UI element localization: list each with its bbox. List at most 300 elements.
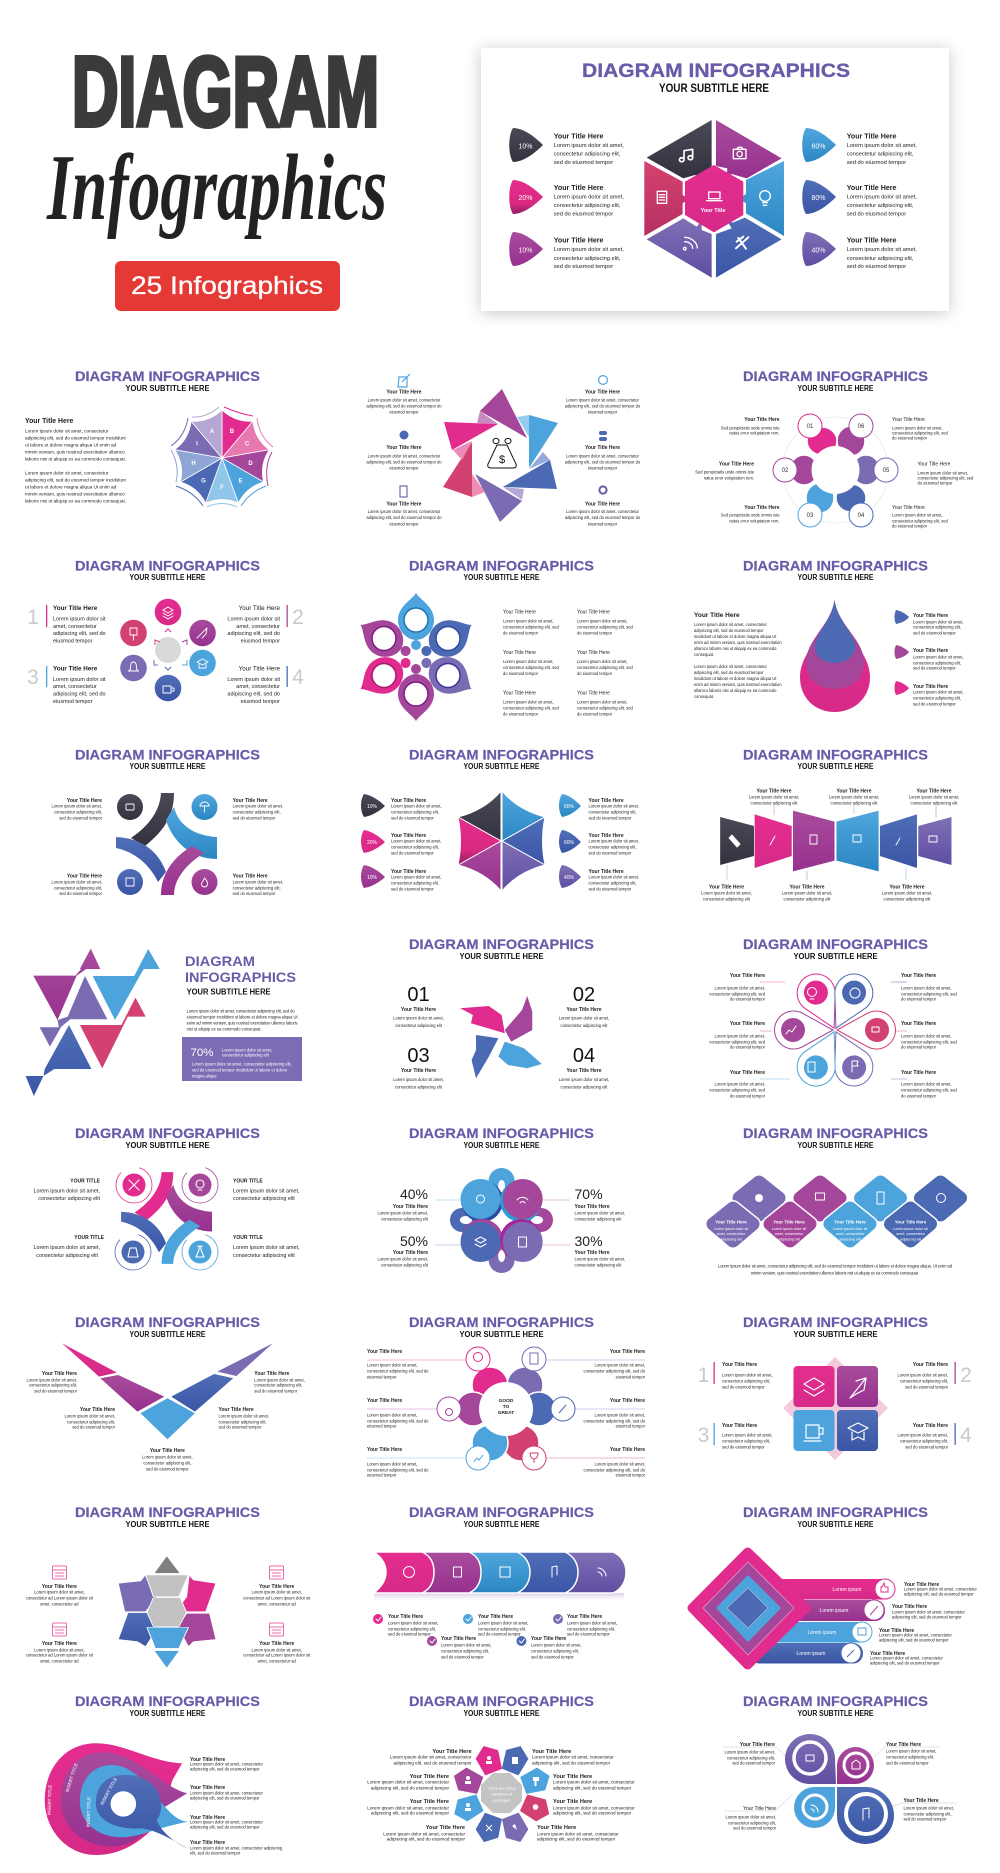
left text: adipiscing elit, sed do eiusmod tempor xyxy=(694,628,764,633)
right text: consectetur adipiscing elit, xyxy=(904,1812,952,1816)
right text: adipiscing elit, sed do eiusmod tempor do xyxy=(565,515,641,520)
texts: consectetur adipiscing elit, xyxy=(254,1382,302,1388)
left text: consectetur adipiscing elit, xyxy=(391,810,439,814)
hero left percent markers: 20% xyxy=(518,195,533,202)
text block: laboris nisi ut aliquip ex ea commodo consequat. xyxy=(25,498,126,504)
texts: consectetur adipiscing elit xyxy=(574,1262,622,1268)
left text: Your Title Here xyxy=(410,1774,449,1780)
texts: Your Title Here xyxy=(401,1007,436,1013)
left text: consectetur adipiscing elit, xyxy=(722,1438,770,1444)
heading: YOUR SUBTITLE HERE xyxy=(798,1520,874,1529)
left text: consectetur adipiscing elit, sed xyxy=(709,1088,766,1092)
hero left text: consectetur adipiscing elit, xyxy=(554,152,621,158)
center label: variations of xyxy=(491,1792,513,1796)
heading: DIAGRAM xyxy=(185,954,255,969)
left text xyxy=(695,417,780,524)
texts: Your Title Here xyxy=(80,1407,115,1413)
left text: Your Title Here xyxy=(432,1749,472,1755)
stat box: consectetur adipiscing elit xyxy=(222,1052,270,1058)
left text: Lorem ipsum dolor sit amet, xyxy=(714,1082,765,1086)
texts xyxy=(388,1614,618,1660)
texts: consectetur adipiscing elit, xyxy=(441,1648,489,1654)
heading xyxy=(75,1314,260,1339)
caption xyxy=(718,1264,953,1276)
octagon diagram xyxy=(171,407,273,507)
heading: DIAGRAM INFOGRAPHICS xyxy=(743,1504,928,1520)
left text: Sed perspiciatis unde omnis iste xyxy=(721,512,780,518)
right text: Lorem ipsum dolor sit amet, xyxy=(233,1245,300,1251)
percent markers: 20% xyxy=(367,840,378,846)
bottom text: Your Title Here xyxy=(789,884,825,890)
heading: DIAGRAM INFOGRAPHICS xyxy=(743,1314,928,1330)
right text: Lorem ipsum dolor sit amet, xyxy=(233,804,283,808)
caption: minim veniam, quis nostrud exercitation ullamco laboris nisi ut aliquip ex ea commodo consequat. xyxy=(751,1270,919,1276)
hero right text: consectetur adipiscing elit, xyxy=(847,203,914,209)
heading: DIAGRAM INFOGRAPHICS xyxy=(409,1125,594,1141)
right text: Your Title Here xyxy=(532,1749,571,1755)
left text: do eiusmod tempor xyxy=(730,996,766,1002)
left text: Lorem ipsum dolor sit amet, consectetur xyxy=(367,1806,449,1810)
main title: Infographics script: Infographics xyxy=(46,136,387,240)
diamonds xyxy=(713,1182,960,1241)
stat box: magna aliqua xyxy=(192,1074,217,1078)
bottom text: consectetur adipiscing elit xyxy=(703,896,751,902)
text grid: Your Title Here xyxy=(503,610,536,616)
texts: adipiscing elit, sed do eiusmod tempor xyxy=(879,1638,949,1642)
texts: Your Title Here xyxy=(892,1604,927,1610)
percent markers: 10% xyxy=(367,804,378,810)
text grid: do eiusmod tempor xyxy=(577,671,613,676)
left text: eiusmod tempor xyxy=(389,466,419,470)
left text: Lorem ipsum dolor sit amet, xyxy=(51,804,102,808)
heading: YOUR SUBTITLE HERE xyxy=(798,573,874,582)
right text: Your Title Here xyxy=(892,417,925,423)
circle diagram xyxy=(120,599,216,701)
text grid: do eiusmod tempor xyxy=(577,712,613,716)
texts: consectetur adipiscing elit, xyxy=(218,1420,267,1424)
heading xyxy=(409,1125,594,1150)
left text: consectetur adipiscing elit xyxy=(38,1196,100,1202)
right text: Your Title Here xyxy=(886,1742,921,1748)
panel: arc cross 2 xyxy=(33,1125,300,1270)
ring diagram xyxy=(773,414,898,527)
right text: consectetur adipiscing elit, sed do xyxy=(584,1368,646,1374)
texts: Lorem ipsum dolor sit amet, xyxy=(377,1256,428,1262)
top text: consectetur adipiscing elit xyxy=(751,800,798,806)
center label xyxy=(498,1398,514,1416)
hero center label: Your Title xyxy=(701,208,725,214)
texts: adipiscing elit, sed do eiusmod tempor xyxy=(190,1766,260,1772)
text grid: consectetur adipiscing elit, sed xyxy=(577,665,633,670)
diamond texts: adipiscing elit xyxy=(900,1238,921,1242)
right text: Lorem ipsum dolor sit amet, xyxy=(913,690,964,694)
hero left percent markers: 10% xyxy=(518,144,533,150)
right text: Lorem ipsum dolor sit amet, xyxy=(897,1432,948,1438)
right text: YOUR TITLE xyxy=(233,1235,263,1241)
hero left text: Your Title Here xyxy=(554,132,604,140)
heading xyxy=(743,1125,928,1150)
right text: Your Title Here xyxy=(239,666,280,672)
percent markers: 60% xyxy=(564,804,575,810)
diamond texts: Your Title Here xyxy=(773,1220,805,1224)
heading: DIAGRAM INFOGRAPHICS xyxy=(743,368,928,384)
left text: Your Title Here xyxy=(722,1423,757,1429)
numbers and bars xyxy=(27,605,304,689)
texts: amet, consectetur ad xyxy=(40,1658,79,1664)
body text: Lorem ipsum dolor sit amet, consectetur adipiscing elit, sed do xyxy=(187,1008,295,1014)
swirl shape xyxy=(45,1743,189,1855)
texts: Lorem ipsum dolor sit amet, xyxy=(251,1648,302,1652)
right text: Your Title Here xyxy=(913,684,948,690)
left text: Lorem ipsum dolor sit amet, xyxy=(391,874,442,880)
octagon diagram: A xyxy=(210,429,215,435)
heading xyxy=(743,558,928,582)
left text: sed do eiusmod tempor xyxy=(722,1384,765,1390)
left text xyxy=(51,798,103,896)
right text: Lorem ipsum dolor sit amet, xyxy=(588,804,639,808)
octagon diagram: B xyxy=(230,429,235,435)
bottom text xyxy=(701,884,932,902)
hero left text: sed do eiusmod tempor xyxy=(554,160,613,166)
left text: Your Title Here xyxy=(743,1806,776,1812)
drop chart xyxy=(800,600,870,712)
hero left text xyxy=(554,132,624,270)
text grid xyxy=(503,610,633,716)
text block: ut labore et dolore magna aliqua Ut enim ad xyxy=(25,442,117,448)
stat box: Lorem ipsum dolor sit amet, xyxy=(222,1048,273,1052)
hero right text: sed do eiusmod tempor xyxy=(847,212,906,218)
left text: consectetur adipiscing elit, xyxy=(54,886,102,890)
texts: consectetur adipiscing elit xyxy=(381,1216,429,1222)
ring diagram: 02 xyxy=(782,468,789,474)
left text: adipiscing elit, sed do eiusmod tempor do xyxy=(366,460,442,464)
texts: Your Title Here xyxy=(218,1407,254,1413)
heading: DIAGRAM INFOGRAPHICS xyxy=(75,746,260,762)
hero left text: Your Title Here xyxy=(554,236,604,244)
insert title labels: INSERT TITLE xyxy=(46,1785,53,1815)
right text: Lorem ipsum dolor sit amet, consectetur xyxy=(532,1754,614,1760)
texts: sed do eiusmod tempor xyxy=(531,1654,574,1660)
heading: DIAGRAM INFOGRAPHICS xyxy=(75,1693,260,1709)
left text: Lorem ipsum dolor sit amet, xyxy=(714,1034,765,1038)
right text: Lorem ipsum dolor sit amet, consectetur xyxy=(537,1832,619,1836)
panel: rounded diamonds xyxy=(713,1125,960,1276)
heading xyxy=(743,1314,928,1339)
left text xyxy=(367,1749,472,1842)
text grid: Your Title Here xyxy=(577,690,610,696)
left text: Lorem ipsum dolor sit amet, xyxy=(33,1245,100,1251)
texts: adipiscing elit, sed do eiusmod tempor xyxy=(870,1660,940,1666)
percents: 50% xyxy=(400,1233,428,1249)
right text: consectetur adipiscing elit xyxy=(233,1196,295,1202)
octagon diagram: H xyxy=(191,461,196,467)
bar labels: Lorem ipsum xyxy=(820,1608,848,1614)
panel: four squares xyxy=(698,1314,972,1460)
text block: adipiscing elit, sed do eiusmod tempor incididunt xyxy=(25,478,127,482)
bar labels: Lorem ipsum xyxy=(808,1630,836,1636)
texts: Your Title Here xyxy=(150,1448,185,1454)
texts: Lorem ipsum dolor sit amet, xyxy=(478,1620,529,1626)
center label: GOOD xyxy=(499,1398,514,1404)
panel: four ring petals xyxy=(722,1693,957,1844)
texts: consectetur adipiscing elit, xyxy=(531,1648,579,1654)
flower diagram xyxy=(352,593,480,721)
right text: adipiscing elit, sed do eiusmod tempor xyxy=(553,1810,632,1816)
caption: Lorem ipsum dolor sit amet, consectetur adipiscing elit, sed do eiusmod tempor incididunt ut labore et dolore magna aliqua. Ut enim ad xyxy=(718,1264,953,1268)
panel: arc cross 1 xyxy=(51,746,283,896)
heading xyxy=(743,936,928,961)
hero right text: consectetur adipiscing elit, xyxy=(847,256,914,262)
texts: consectetur adipiscing elit xyxy=(395,1084,443,1090)
bar labels: Lorem ipsum xyxy=(797,1651,825,1657)
left text: Sed perspiciatis unde omnis iste xyxy=(721,426,780,430)
texts: Your Title Here xyxy=(574,1250,610,1256)
left text: Lorem ipsum dolor sit amet, consectetur xyxy=(694,664,767,669)
left text: adipiscing elit, sed do eiusmod tempor xyxy=(387,1836,465,1842)
left text: eiusmod tempor xyxy=(389,522,419,526)
ring diagram: 05 xyxy=(883,468,890,474)
texts: Lorem ipsum dolor sit amet, consectetur xyxy=(190,1820,263,1824)
right text: consectetur adipiscing elit, sed do xyxy=(584,1468,646,1472)
left text: consectetur adipiscing elit, sed do xyxy=(367,1418,429,1424)
texts xyxy=(393,1007,609,1090)
text grid: consectetur adipiscing elit, sed xyxy=(503,665,559,670)
right text: consectetur adipiscing elit, sed xyxy=(892,518,948,524)
right text: sed do eiusmod tempor xyxy=(588,816,632,820)
text block: laboris nisi ut aliquip ex ea commodo consequat. xyxy=(25,456,126,462)
stat box: 70% xyxy=(190,1047,214,1059)
right text: sed do eiusmod tempor xyxy=(233,891,276,896)
ring diagram: 01 xyxy=(807,424,814,430)
bottom text: Your Title Here xyxy=(709,884,744,890)
octagon diagram: D xyxy=(248,461,253,467)
right text: Lorem ipsum dolor sit xyxy=(227,616,280,622)
panel: star hexagon xyxy=(361,746,639,892)
left text: Lorem ipsum dolor sit amet, xyxy=(724,1750,775,1754)
texts: sed do eiusmod tempor xyxy=(254,1388,298,1394)
percents: 70% xyxy=(574,1186,603,1202)
right text: consectetur adipiscing elit, xyxy=(900,1378,948,1384)
bottom text: Lorem ipsum dolor sit amet, xyxy=(701,890,752,896)
texts: Your Title Here xyxy=(388,1614,423,1620)
heading: YOUR SUBTITLE HERE xyxy=(464,762,540,771)
text grid: consectetur adipiscing elit, sed xyxy=(577,624,633,630)
texts: Lorem ipsum dolor sit amet, xyxy=(388,1620,439,1626)
diamond texts: Your Title Here xyxy=(895,1220,927,1224)
right text: consectetur adipiscing elit, xyxy=(588,844,637,850)
right text xyxy=(901,973,957,1098)
pentagons xyxy=(449,1742,554,1846)
right text: Your Title Here xyxy=(913,1423,948,1429)
right text: Lorem ipsum dolor sit amet, consectetur xyxy=(566,454,640,458)
texts: Lorem ipsum dolor sit amet, xyxy=(393,1016,444,1020)
heading: YOUR SUBTITLE HERE xyxy=(130,762,206,771)
right text: consectetur adipiscing elit, sed xyxy=(892,430,948,436)
texts: Your Title Here xyxy=(42,1371,77,1377)
hero right text: Your Title Here xyxy=(847,184,897,192)
texts xyxy=(870,1582,977,1666)
texts: amet, consectetur ad xyxy=(258,1658,297,1664)
octagon diagram: F xyxy=(220,485,224,491)
texts xyxy=(26,1371,305,1472)
right text xyxy=(897,1362,949,1450)
right text: adipiscing elit, sed do xyxy=(227,692,280,698)
insert title labels: INSERT TITLE xyxy=(99,1777,118,1806)
badge: 25 Infographics xyxy=(115,261,340,311)
left text: Your Title Here xyxy=(722,1362,757,1368)
right text: Your Title Here xyxy=(233,798,268,804)
left text: Lorem ipsum dolor sit amet, xyxy=(391,838,442,844)
text grid: consectetur adipiscing elit, sed xyxy=(503,624,559,630)
text block xyxy=(25,418,127,504)
left text xyxy=(367,1349,429,1478)
right text xyxy=(886,1742,954,1822)
connectors xyxy=(760,982,907,1079)
text grid: Lorem ipsum dolor sit amet, xyxy=(577,618,628,624)
left text: natus error voluptatem rem. xyxy=(704,476,754,480)
left text: sed do eiusmod tempor xyxy=(722,1444,765,1450)
right text: sed do eiusmod tempor xyxy=(588,886,632,892)
texts: Your Title Here xyxy=(478,1614,513,1620)
texts: Lorem ipsum dolor sit amet, xyxy=(574,1210,625,1216)
right text: adipiscing elit, sed do eiusmod tempor do xyxy=(565,460,641,464)
left text: Your Title Here xyxy=(719,462,754,468)
left text: eiusmod tempor xyxy=(367,1374,397,1380)
left text xyxy=(709,973,766,1098)
right text xyxy=(565,390,641,526)
texts: elit, sed do eiusmod tempor xyxy=(190,1850,241,1856)
numbers and bars: 1 xyxy=(27,606,39,629)
right text: Your Title Here xyxy=(901,1021,936,1027)
right text xyxy=(227,605,280,705)
text block: adipiscing elit, sed do eiusmod tempor incididunt xyxy=(25,436,127,440)
connectors xyxy=(435,1200,570,1245)
texts: adipiscing elit, sed do eiusmod tempor xyxy=(892,1614,962,1620)
numbers and bars: 1 xyxy=(698,1364,709,1387)
texts: Lorem ipsum dolor sit amet, xyxy=(64,1414,115,1418)
texts: Lorem ipsum dolor sit amet, consectetur adipiscing xyxy=(190,1846,283,1850)
left text: amet, consectetur xyxy=(53,684,97,690)
text block: minim veniam, quis nostrud exercitation ullamco xyxy=(25,450,125,454)
hero heading xyxy=(582,60,850,95)
heading xyxy=(743,746,928,771)
texts: Lorem ipsum dolor sit amet, xyxy=(142,1454,193,1460)
left text: Your Title Here xyxy=(367,1447,402,1453)
right text xyxy=(532,1749,635,1842)
left text: consectetur adipiscing elit, xyxy=(391,844,439,850)
panel: six circle ring xyxy=(695,368,974,528)
bottom text: Lorem ipsum dolor sit amet, xyxy=(782,890,832,896)
heading xyxy=(409,1314,594,1339)
heading: YOUR SUBTITLE HERE xyxy=(798,384,874,393)
left text: eiusmod tempor xyxy=(389,410,419,414)
panel: 01-04 pinwheel xyxy=(393,936,609,1090)
petals xyxy=(437,1347,575,1470)
texts: sed do eiusmod tempor xyxy=(72,1424,116,1430)
left text: sed do eiusmod tempor xyxy=(732,1760,776,1766)
left text: sed do eiusmod tempor xyxy=(733,1826,777,1830)
diamond texts: Lorem ipsum dolor sit xyxy=(772,1227,806,1231)
hex arrows xyxy=(118,1556,216,1668)
heading: YOUR SUBTITLE HERE xyxy=(130,1709,206,1718)
left text: do eiusmod tempor xyxy=(730,1094,766,1098)
right text: do eiusmod tempor xyxy=(901,1094,937,1098)
left text: ullamco laboris nisi ut aliquip ex ea commodo xyxy=(694,688,777,693)
texts: Lorem ipsum dolor sit amet, xyxy=(559,1016,609,1020)
heading: YOUR SUBTITLE HERE xyxy=(464,1520,540,1529)
icon circles xyxy=(117,794,218,895)
right text: Lorem ipsum dolor sit amet, xyxy=(588,838,639,844)
diamond texts: amet, consectetur xyxy=(896,1232,926,1236)
V shape xyxy=(62,1343,273,1439)
triangle shapes xyxy=(26,949,160,1096)
texts: Your Title Here xyxy=(531,1636,566,1642)
connectors xyxy=(722,1747,957,1811)
right text: Your Title Here xyxy=(553,1774,592,1780)
left text: sed do eiusmod tempor xyxy=(59,816,103,820)
calendar icons xyxy=(52,1566,284,1636)
heading: DIAGRAM INFOGRAPHICS xyxy=(743,746,928,762)
heading xyxy=(75,746,260,771)
top text: Lorem ipsum dolor sit amet, xyxy=(909,794,959,800)
right text: eiusmod tempor xyxy=(616,1472,646,1478)
right text: consectetur adipiscing elit, sed xyxy=(918,476,974,480)
panel: six loops xyxy=(709,936,957,1098)
bottom text: Your Title Here xyxy=(889,884,925,890)
diamond texts: Your Title Here xyxy=(834,1220,866,1224)
texts: Your Title Here xyxy=(566,1007,602,1013)
top text: consectetur adipiscing elit xyxy=(911,800,958,806)
left text: Lorem ipsum dolor sit amet, xyxy=(725,1814,776,1820)
heading: YOUR SUBTITLE HERE xyxy=(794,952,878,961)
right text: adipiscing elit, sed do eiusmod tempor xyxy=(532,1760,611,1766)
texts: consectetur adipiscing elit, xyxy=(478,1626,526,1632)
loops xyxy=(775,967,895,1093)
icon circles xyxy=(115,1167,218,1270)
right text: do eiusmod tempor xyxy=(901,996,937,1002)
texts: Your Title Here xyxy=(259,1584,294,1590)
panel: hexagon arrows xyxy=(26,1504,311,1668)
text grid: consectetur adipiscing elit, sed xyxy=(577,706,633,710)
heading: YOUR SUBTITLE HERE xyxy=(187,988,271,996)
diamond texts: amet, consectetur xyxy=(717,1232,746,1236)
hero right text xyxy=(847,132,917,270)
left text: Lorem ipsum dolor sit amet, xyxy=(722,1372,773,1378)
percent markers xyxy=(361,794,581,888)
heading xyxy=(75,558,260,582)
texts: Lorem ipsum dolor sit amet, xyxy=(34,1590,85,1594)
right text: Your Title Here xyxy=(233,874,268,880)
right text: Your Title Here xyxy=(901,1070,936,1076)
heading: YOUR SUBTITLE HERE xyxy=(126,1520,210,1529)
texts: sed do eiusmod tempor xyxy=(146,1466,189,1472)
text grid: Your Title Here xyxy=(577,650,610,656)
texts: Lorem ipsum dolor sit amet, consectetur xyxy=(892,1610,965,1614)
right text: Lorem ipsum dolor sit amet, consectetur xyxy=(553,1780,635,1784)
percents xyxy=(400,1186,603,1249)
left text: Your Title Here xyxy=(730,973,765,979)
texts: adipiscing elit, sed do eiusmod tempor xyxy=(190,1824,260,1830)
texts: consectetur adipiscing elit xyxy=(381,1262,429,1268)
diamond texts: Lorem ipsum dolor sit xyxy=(833,1227,867,1231)
hero right text: Lorem ipsum dolor sit amet, xyxy=(847,247,917,253)
bars xyxy=(750,1579,895,1664)
right text: Your Title Here xyxy=(901,973,936,979)
left text: adipiscing elit, sed do eiusmod tempor xyxy=(371,1810,449,1816)
right text: eiusmod tempor xyxy=(616,1374,646,1380)
texts: Your Title Here xyxy=(879,1628,914,1634)
left text: ullamco laboris nisi ut aliquip ex ea commodo xyxy=(694,646,777,651)
